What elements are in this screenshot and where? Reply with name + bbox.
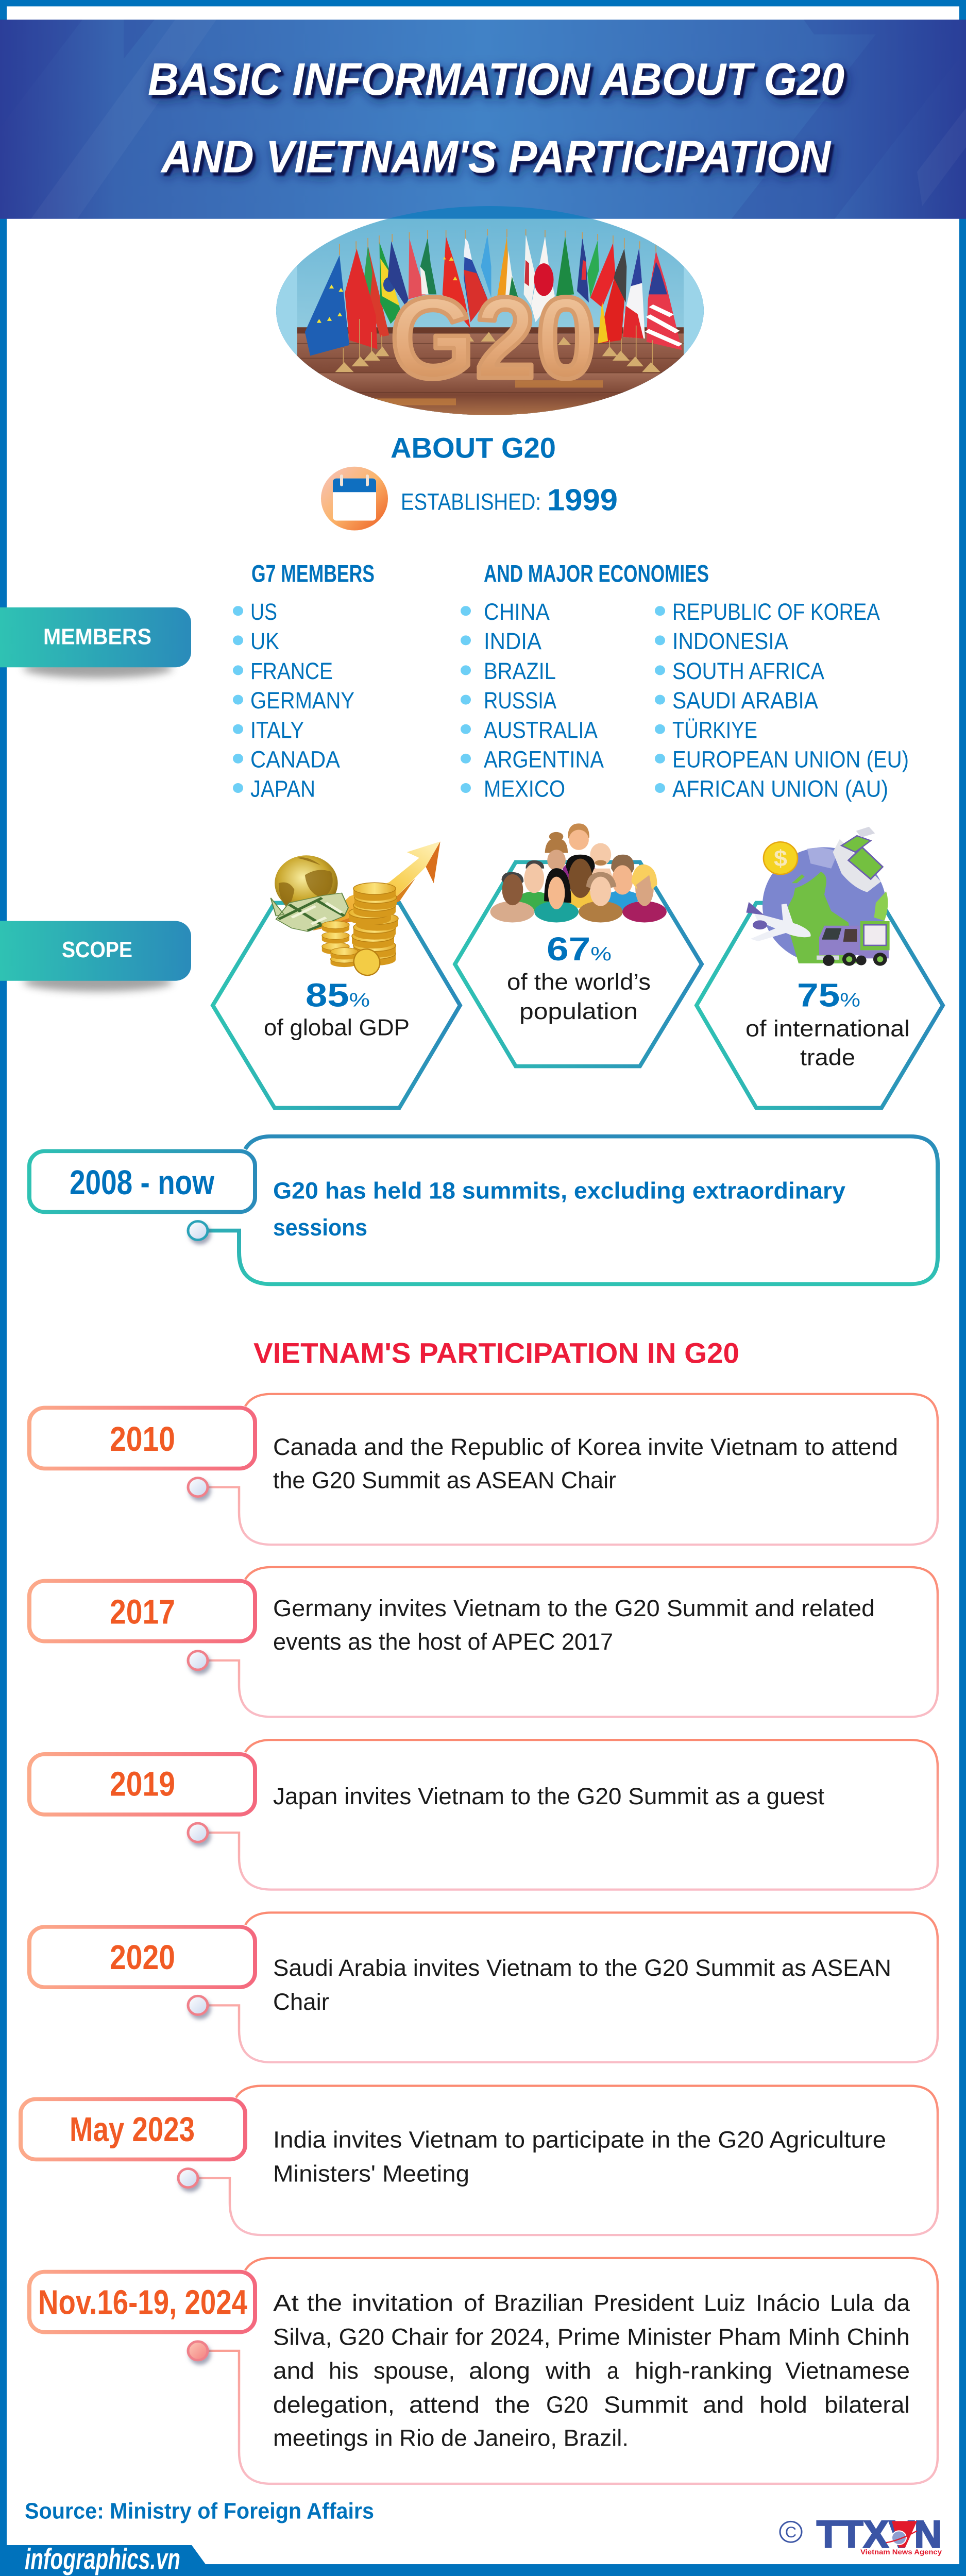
text line 3: high-ranking	[635, 2358, 772, 2384]
panel: 2020	[29, 1912, 938, 2062]
text line 3: Vietnamese	[785, 2358, 910, 2384]
established year: 1999	[547, 483, 618, 517]
panel: 2010: Canada and the Republic of Korea invite Vietnam to attend	[273, 1434, 898, 1460]
text line 1: the	[307, 2290, 342, 2316]
list: major economies column 2	[655, 599, 909, 802]
list: major economies column 2: INDONESIA	[672, 628, 789, 654]
truck	[817, 921, 890, 966]
text line 3: spouse,	[374, 2358, 455, 2384]
back row	[518, 823, 639, 911]
text line 1: Inácio	[756, 2290, 820, 2316]
panel: 75% of international trade: of international	[745, 1015, 910, 1041]
source note: Source: Ministry of Foreign Affairs	[25, 2498, 374, 2523]
panel: 2010: 2010	[110, 1420, 175, 1459]
G20 gold letters: G20	[390, 273, 597, 402]
logo: TTXVN Vietnam News Agency: TTXVN	[817, 2513, 942, 2556]
panel: 2010	[29, 1394, 938, 1545]
panel: 67% of population: population	[519, 998, 638, 1024]
text line 3: his	[329, 2358, 359, 2384]
panel: 85% of global GDP: of global GDP	[264, 1014, 410, 1040]
scope tab	[0, 921, 191, 992]
panel: 2019	[29, 1740, 938, 1890]
list: major economies column 1: MEXICO	[484, 776, 565, 802]
dollar coin	[764, 842, 798, 874]
list: G7 members: US	[250, 599, 277, 625]
dollar coin: $	[774, 845, 787, 871]
list: major economies column 2: AFRICAN UNION (AU)	[672, 776, 888, 802]
list: major economies column 2: REPUBLIC OF KOREA	[672, 599, 880, 625]
icon: globe with plane, ship and truck	[746, 827, 890, 966]
text line 1: invitation	[352, 2290, 453, 2316]
list: G7 members: JAPAN	[250, 776, 315, 802]
text line 1: Brazilian	[494, 2290, 584, 2316]
heading: Vietnam's participation: VIETNAM'S PARTICIPATION IN G20	[253, 1338, 739, 1369]
text line 3: with	[545, 2358, 591, 2384]
front row	[490, 865, 667, 922]
panel: 2008 - now: G20 has held 18 summits, excluding extraordinary	[273, 1178, 845, 1204]
list: G7 members: ITALY	[250, 717, 304, 743]
text line 1: Lula	[830, 2290, 874, 2316]
text line 1: Luiz	[704, 2290, 745, 2316]
text line 3	[273, 2358, 910, 2384]
panel: 67% of population	[455, 862, 702, 1066]
list: major economies column 1: BRAZIL	[484, 658, 556, 684]
list: major economies column 2: TÜRKIYE	[672, 717, 757, 743]
panel: May 2023: India invites Vietnam to participate in the G20 Agriculture	[273, 2127, 886, 2153]
text line 4: delegation,	[273, 2392, 395, 2418]
icon: calendar	[321, 467, 388, 531]
list: major economies column 1: RUSSIA	[484, 687, 557, 714]
cargo ship	[833, 827, 883, 892]
panel: 2008 - now: sessions	[273, 1214, 367, 1241]
list: major economies column 1: INDIA	[484, 628, 542, 654]
panel: 2019: Japan invites Vietnam to the G20 Summit as a guest	[273, 1783, 824, 1809]
text line 1: da	[884, 2290, 910, 2316]
list: major economies column 2: EUROPEAN UNION (EU)	[672, 747, 909, 772]
panel: 2020: Saudi Arabia invites Vietnam to the G20 Summit as ASEAN	[273, 1955, 891, 1981]
panel: 67% of population: 67 %	[547, 930, 612, 967]
panel: Nov.16-19, 2024: Nov.16-19, 2024	[38, 2283, 247, 2321]
panel: May 2023	[21, 2086, 938, 2235]
panel: May 2023: Ministers' Meeting	[273, 2160, 469, 2187]
list: G7 members: UK	[250, 628, 279, 654]
panel: 2017	[29, 1567, 938, 1717]
list: major economies column 1: AUSTRALIA	[484, 717, 598, 743]
list: G7 members: GERMANY	[250, 687, 354, 714]
airplane	[746, 902, 811, 941]
panel: 2020: 2020	[110, 1938, 175, 1977]
text line 4: the	[495, 2392, 530, 2418]
heading: and major economies: AND MAJOR ECONOMIES	[484, 561, 709, 587]
panel: 85% of global GDP	[213, 903, 460, 1108]
text line 4: Summit	[604, 2392, 688, 2418]
panel: 67% of population: of the world’s	[507, 969, 651, 995]
list: G7 members: CANADA	[250, 747, 341, 772]
established label	[401, 483, 618, 517]
footer tab	[0, 2543, 966, 2576]
text line 4	[273, 2392, 910, 2418]
text line 3: and	[273, 2358, 314, 2384]
panel: 75% of international trade: trade	[800, 1044, 855, 1070]
panel: 2008 - now	[29, 1137, 938, 1284]
established label: ESTABLISHED:	[401, 489, 541, 515]
panel: 2017: events as the host of APEC 2017	[273, 1629, 613, 1655]
panel: 2008 - now: 2008 - now	[70, 1164, 215, 1202]
heading: G7 members: G7 MEMBERS	[251, 561, 375, 587]
logo: TTXVN Vietnam News Agency: Vietnam News Agency	[860, 2548, 942, 2556]
list: G7 members: FRANCE	[250, 658, 333, 684]
panel: Nov.16-19, 2024	[29, 2258, 938, 2484]
flags	[305, 229, 682, 372]
flag poles	[340, 229, 656, 368]
members tab: MEMBERS	[43, 623, 151, 649]
panel: 2010: the G20 Summit as ASEAN Chair	[273, 1467, 616, 1493]
text line 1: President	[594, 2290, 694, 2316]
header banner	[0, 20, 966, 219]
text line 4: attend	[409, 2392, 480, 2418]
list: major economies column 1	[461, 599, 604, 802]
title line 2: AND VIETNAM'S PARTICIPATION	[160, 131, 832, 182]
members tab	[0, 607, 191, 678]
panel: May 2023: May 2023	[70, 2111, 195, 2149]
panel: 2017: Germany invites Vietnam to the G20 Summit and related	[273, 1595, 875, 1621]
text line 4: hold	[759, 2392, 807, 2418]
text line 3: a	[607, 2358, 619, 2384]
panel: 2019: 2019	[110, 1765, 175, 1803]
list: major economies column 2: SAUDI ARABIA	[672, 687, 819, 714]
text line 5: meetings in Rio de Janeiro, Brazil.	[273, 2425, 629, 2451]
text line 1	[273, 2290, 910, 2316]
text line 1: of	[464, 2290, 485, 2316]
footer tab: infographics.vn	[25, 2543, 180, 2575]
list: major economies column 1: ARGENTINA	[484, 747, 604, 772]
list: major economies column 1: CHINA	[484, 599, 550, 625]
text line 4: and	[703, 2392, 744, 2418]
panel: 75% of international trade: 75%	[797, 977, 860, 1013]
text line 4: G20	[546, 2392, 588, 2418]
panel: 75% of international trade	[697, 903, 943, 1108]
G20 flags image	[258, 206, 721, 417]
heading: about G20: ABOUT G20	[391, 433, 556, 464]
text line 1: At	[273, 2290, 299, 2316]
list: major economies column 2: SOUTH AFRICA	[672, 658, 825, 684]
text line 3: along	[469, 2358, 530, 2384]
scope tab: SCOPE	[62, 937, 132, 962]
panel: 2017: 2017	[110, 1593, 175, 1631]
text line 2: Silva, G20 Chair for 2024, Prime Minister Pham Minh Chinh	[273, 2324, 910, 2350]
panel: 85% of global GDP: 85 %	[306, 977, 370, 1013]
logo: TTXVN Vietnam News Agency: C	[785, 2524, 796, 2541]
panel: 2020: Chair	[273, 1989, 329, 2015]
title line 1: BASIC INFORMATION ABOUT G20	[148, 54, 844, 105]
icon: gold globe, cash, coins and arrow	[271, 841, 440, 979]
list: G7 members	[233, 599, 354, 802]
icon: group of people	[490, 823, 667, 922]
text line 4: bilateral	[824, 2392, 910, 2418]
